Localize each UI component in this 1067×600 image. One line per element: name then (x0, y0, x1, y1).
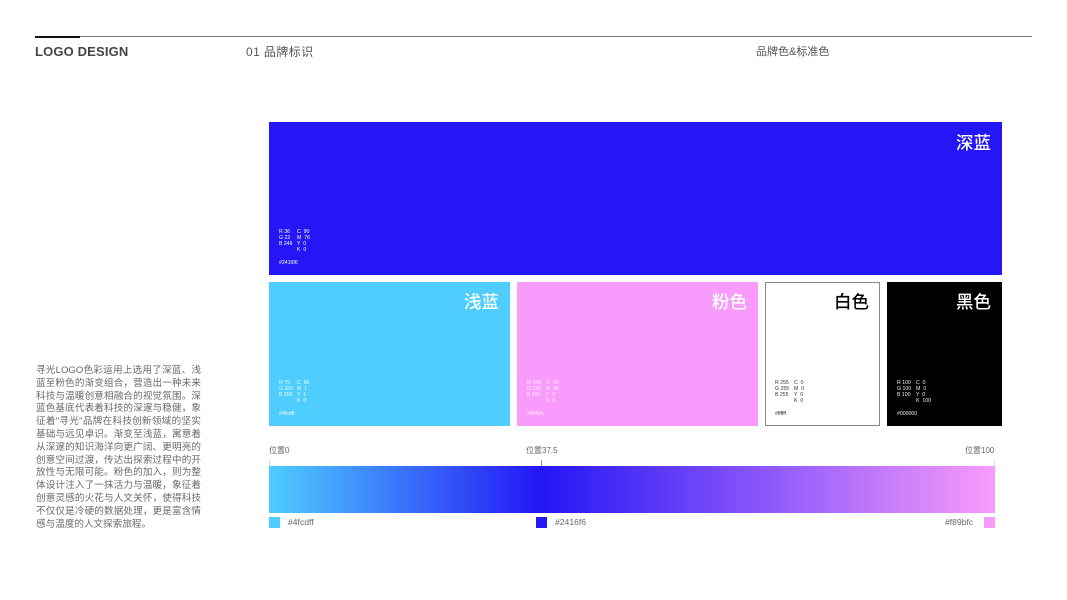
colour values: pink: C 19 M 46 Y 0 K 0 (546, 380, 559, 404)
description text block: 创意灵感的火花与人文关怀，使得科技 (36, 493, 201, 504)
section subheading: brand and standard colours: 品牌色&标准色 (756, 46, 829, 58)
gradient tick 100 (994, 460, 995, 466)
swatch name: white: 白色 (834, 292, 869, 312)
gradient position label 37.5: 位置37.5 (526, 446, 558, 455)
gradient bar (269, 466, 995, 513)
colour values: pink (527, 380, 559, 417)
legend swatch: pink (984, 517, 995, 528)
colour values: white (775, 380, 804, 417)
legend swatch: light blue (269, 517, 280, 528)
colour values: white: C 0 M 0 Y 0 K 0 (794, 380, 804, 404)
description text block: 寻光LOGO色彩运用上选用了深蓝、浅 (36, 365, 201, 376)
header accent bar (35, 36, 80, 38)
colour values: black: R 100 G 100 B 100 (897, 380, 911, 398)
gradient position label 0: 位置0 (269, 446, 289, 455)
description text block: 科技与温暖创意相融合的视觉氛围。深 (36, 391, 201, 402)
colour values: light blue: R 79 G 205 B 255 (279, 380, 293, 398)
colour values: white: #ffffff (775, 411, 786, 417)
colour values: pink: R 248 G 155 B 252 (527, 380, 541, 398)
swatch name: light blue: 浅蓝 (464, 292, 499, 312)
description text block: 放性与无限可能。粉色的加入，则为整 (36, 467, 201, 478)
swatch name: deep blue: 深蓝 (956, 133, 991, 153)
panel: white swatch (765, 282, 880, 426)
description text block: 体设计注入了一抹活力与温暖，象征着 (36, 480, 201, 491)
swatch name: pink: 粉色 (712, 292, 747, 312)
header rule (35, 36, 1032, 37)
colour values: deep blue (279, 229, 310, 266)
colour values: light blue (279, 380, 310, 417)
panel: deep blue swatch (269, 122, 1002, 275)
legend label: light blue: #4fcdff (288, 517, 314, 527)
title: LOGO DESIGN: LOGO DESIGN (35, 44, 128, 59)
colour values: light blue: C 60 M 1 Y 1 K 0 (297, 380, 309, 404)
colour values: light blue: #4fcdff (279, 411, 294, 417)
colour values: deep blue: C 90 M 76 Y 0 K 0 (297, 229, 310, 253)
swatch name: black: 黑色 (956, 292, 991, 312)
gradient tick 37.5 (541, 460, 542, 466)
gradient position label 100: 位置100 (965, 446, 994, 455)
legend swatch: deep blue (536, 517, 547, 528)
description text block: 蓝至粉色的渐变组合，营造出一种未来 (36, 378, 201, 389)
legend label: deep blue: #2416f6 (555, 517, 586, 527)
gradient tick 0 (269, 460, 270, 466)
colour values: white: R 255 G 255 B 255 (775, 380, 789, 398)
description text block: 感与温度的人文探索旅程。 (36, 519, 151, 530)
panel: pink swatch (517, 282, 758, 426)
colour values: deep blue: #2416f6 (279, 260, 298, 266)
colour values: black: #000000 (897, 411, 917, 417)
section heading: brand identity: 01 品牌标识 (246, 45, 313, 59)
panel: light blue swatch (269, 282, 510, 426)
colour values: black (897, 380, 931, 417)
description text block: 基础与远见卓识。渐变至浅蓝，寓意着 (36, 429, 201, 440)
description text block: 从深邃的知识海洋向更广阔、更明亮的 (36, 442, 201, 453)
legend label: pink: #f89bfc (945, 517, 973, 527)
colour values: deep blue: R 36 G 22 B 246 (279, 229, 293, 247)
description text block (36, 364, 201, 530)
panel: black swatch (887, 282, 1002, 426)
colour values: black: C 0 M 0 Y 0 K 100 (916, 380, 931, 404)
description text block: 蓝色基底代表着科技的深邃与稳健，象 (36, 403, 201, 414)
description text block: 创意空间过渡，传达出探索过程中的开 (36, 455, 201, 466)
description text block: 不仅仅是冷硬的数据处理，更是富含情 (36, 506, 201, 517)
description text block: 征着"寻光"品牌在科技创新领域的坚实 (36, 416, 201, 427)
colour values: pink: #f89bfc (527, 411, 544, 417)
